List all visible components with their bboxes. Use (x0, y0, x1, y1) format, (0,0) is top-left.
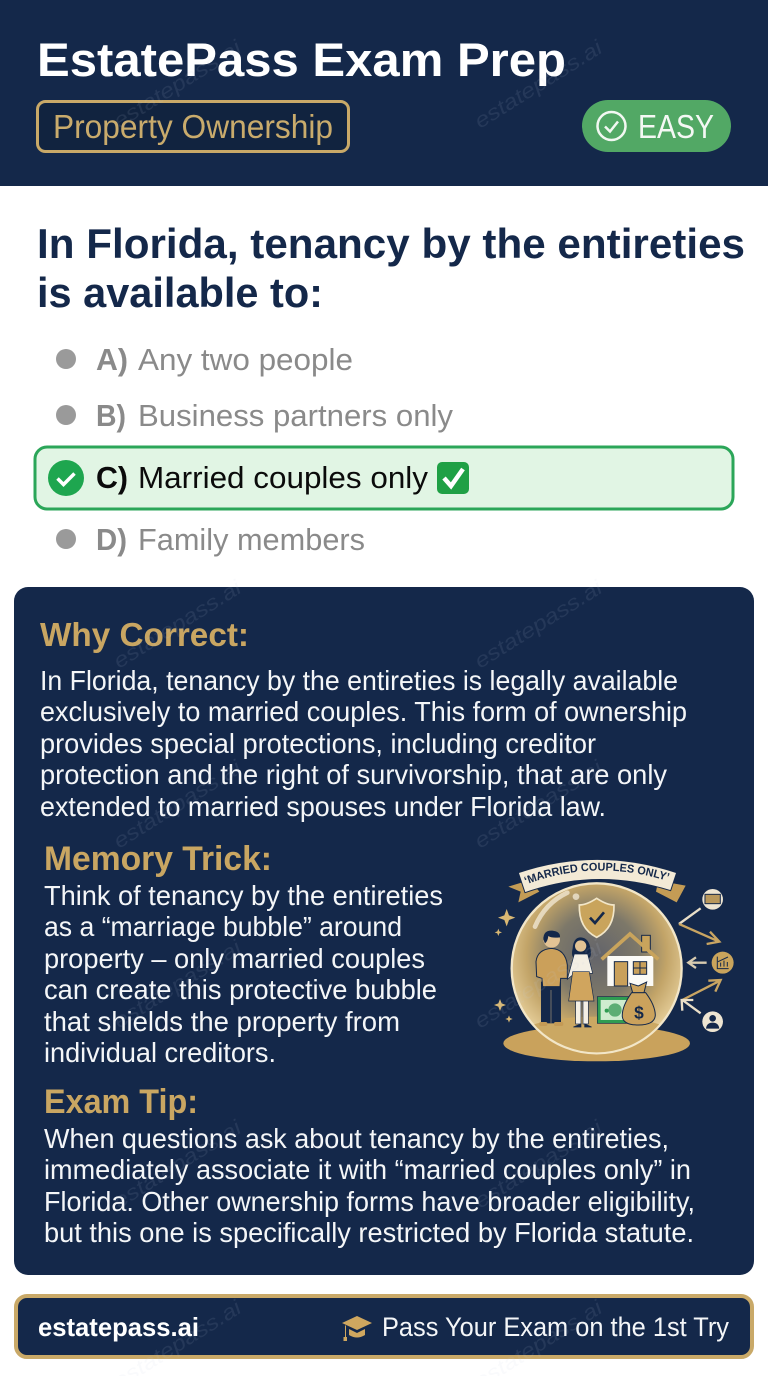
text: estatepass.ai (109, 36, 247, 133)
difficulty badge (582, 100, 731, 152)
text: exam tip: When questions ask about tenancy by the entireties, (44, 1123, 669, 1154)
text: exam tip: Florida. Other ownership forms have broader eligibility, (44, 1186, 695, 1217)
text: memory trick: as a “marriage bubble” around (44, 911, 402, 942)
icon: creditor bill (702, 889, 723, 910)
category tag: Property Ownership (53, 108, 333, 145)
option C correct answer (35, 447, 733, 509)
text: estatepass.ai (109, 756, 247, 853)
money (597, 997, 629, 1023)
heading: exam tip: Exam Tip: (44, 1083, 198, 1121)
banner ribbon (508, 860, 686, 902)
heading: memory trick: Memory Trick: (44, 840, 272, 878)
text: estatepass.ai (470, 936, 608, 1033)
text: memory trick: property – only married couples (44, 943, 425, 974)
text: memory trick: can create this protective bubble (44, 974, 437, 1005)
option B: B) (96, 398, 126, 433)
money bag: $ (634, 1002, 644, 1022)
text: memory trick: that shields the property from (44, 1006, 400, 1037)
base ellipse (503, 1025, 690, 1061)
text: estatepass.ai (109, 1116, 247, 1213)
money bag (622, 982, 655, 1025)
icon: graduation cap (342, 1316, 372, 1341)
banner ribbon: ‘MARRIED COUPLES ONLY’ (524, 862, 670, 884)
text: why correct (40, 665, 687, 822)
option C correct answer: C) (96, 460, 128, 495)
man (536, 931, 567, 1026)
text: estatepass.ai (470, 1116, 608, 1213)
text: exam tip: but this one is specifically restricted by Florida statute. (44, 1217, 694, 1248)
option A: A) (96, 342, 128, 377)
text: why correct: exclusively to married couples. This form of ownership (40, 696, 687, 727)
footer brand: estatepass.ai (38, 1312, 199, 1342)
text: estatepass.ai (470, 756, 608, 853)
icon: shield (579, 898, 614, 937)
title: EstatePass Exam Prep (37, 33, 566, 86)
footer bar (16, 1296, 752, 1357)
text: memory trick (44, 880, 443, 1068)
text: memory trick: individual creditors. (44, 1037, 276, 1068)
icon: creditor chart (712, 952, 734, 974)
option D: Family members (138, 522, 365, 557)
question heading: In Florida, tenancy by the entireties (37, 220, 745, 267)
text: exam tip (44, 1123, 695, 1248)
text: estatepass.ai (470, 36, 608, 133)
difficulty badge: EASY (638, 108, 714, 145)
text: why correct: protection and the right of survivorship, that are only (40, 759, 667, 790)
question heading: is available to: (37, 269, 323, 316)
text: why correct: In Florida, tenancy by the entireties is legally available (40, 665, 678, 696)
icon: check mark box (437, 462, 469, 494)
footer tagline: Pass Your Exam on the 1st Try (382, 1312, 729, 1342)
text: exam tip: immediately associate it with “married couples only” in (44, 1154, 691, 1185)
house (602, 934, 658, 986)
text: why correct: provides special protections, including creditor (40, 728, 596, 759)
text: estatepass.ai (470, 576, 608, 673)
text: memory trick: Think of tenancy by the entireties (44, 880, 443, 911)
category tag (38, 102, 348, 152)
text: estatepass.ai (109, 576, 247, 673)
heading: why correct: Why Correct: (40, 616, 249, 653)
icon: creditor person (702, 1011, 723, 1032)
option C correct answer: Married couples only (138, 460, 428, 495)
option A: Any two people (138, 342, 353, 377)
icon: green check circle (48, 460, 84, 496)
arrows (679, 908, 721, 1013)
panel: explanation (14, 587, 754, 1275)
illustration: marriage bubble (494, 860, 734, 1062)
icon: sparkles (494, 909, 515, 1023)
question heading (37, 220, 745, 316)
text: why correct: extended to married spouses under Florida law. (40, 791, 606, 822)
text: estatepass.ai (109, 936, 247, 1033)
option B: Business partners only (138, 398, 453, 433)
option D: D) (96, 522, 127, 557)
bubble (512, 883, 682, 1053)
header band (0, 0, 768, 186)
woman (567, 937, 594, 1027)
